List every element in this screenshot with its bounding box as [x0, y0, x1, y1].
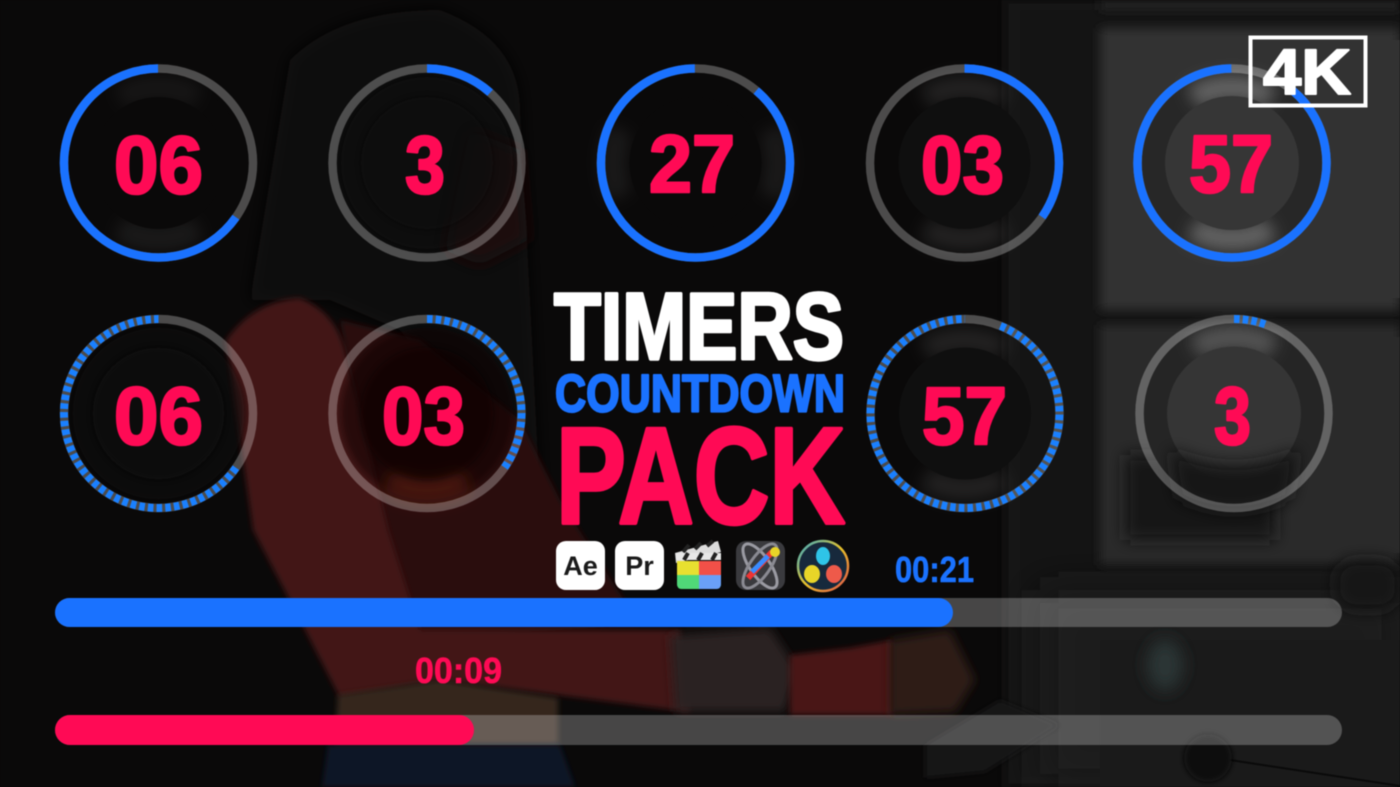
title: COUNTDOWN: COUNTDOWN — [555, 364, 845, 424]
timer ring: 03 dotted: 03 — [382, 371, 465, 462]
jeans — [322, 745, 575, 787]
timer ring: 3 dotted: 3 — [1214, 371, 1251, 462]
label: 00:21: 00:21 — [895, 549, 974, 590]
timer ring: 06 dotted — [64, 319, 253, 508]
title: TIMERS: TIMERS — [554, 274, 844, 380]
icon: After Effects: Ae — [563, 551, 598, 581]
timer ring: 57 solid — [1099, 30, 1365, 296]
software icons row — [556, 539, 848, 593]
timer ring: 3 solid — [332, 68, 522, 258]
timer ring: 06 solid: 06 — [114, 120, 203, 211]
icon: DaVinci Resolve — [798, 541, 848, 591]
timer ring: 27 solid — [562, 30, 829, 296]
icon: Premiere Pro — [615, 541, 664, 590]
progress bar: blue 00:21 — [55, 549, 1342, 627]
title: PACK: PACK — [556, 400, 845, 553]
waist — [335, 680, 558, 745]
title block — [554, 274, 845, 553]
handle and cable — [1230, 760, 1400, 786]
timer ring: 27 solid: 27 — [649, 119, 735, 210]
timer ring: 57 dotted — [870, 319, 1060, 508]
icon: Motion — [736, 539, 785, 593]
chest in shadow — [340, 320, 640, 640]
badge: 4K: 4K — [1263, 36, 1351, 108]
timer ring: 03 dotted — [332, 319, 522, 508]
icon: Premiere Pro: Pr — [625, 551, 654, 581]
timer ring: 03 solid: 03 — [921, 120, 1004, 211]
icon: After Effects — [556, 541, 605, 590]
timer ring: 57 dotted: 57 — [922, 371, 1007, 462]
timer ring: 57 solid: 57 — [1189, 119, 1273, 210]
icon: Final Cut Pro — [675, 541, 721, 589]
timer ring: 3 solid: 3 — [405, 120, 445, 211]
hand left — [670, 628, 798, 712]
progress bar: pink 00:09 — [55, 650, 1342, 745]
sleeve right — [790, 640, 893, 715]
timer ring: 3 dotted — [1140, 319, 1328, 512]
label: 00:09: 00:09 — [415, 650, 502, 691]
face — [445, 130, 528, 265]
timer ring: 06 dotted: 06 — [114, 371, 203, 462]
hand right — [890, 630, 975, 715]
timer ring: 03 solid — [870, 68, 1059, 258]
arm in red top — [226, 298, 690, 712]
hair — [250, 10, 540, 500]
timer ring: 06 solid — [27, 31, 290, 295]
